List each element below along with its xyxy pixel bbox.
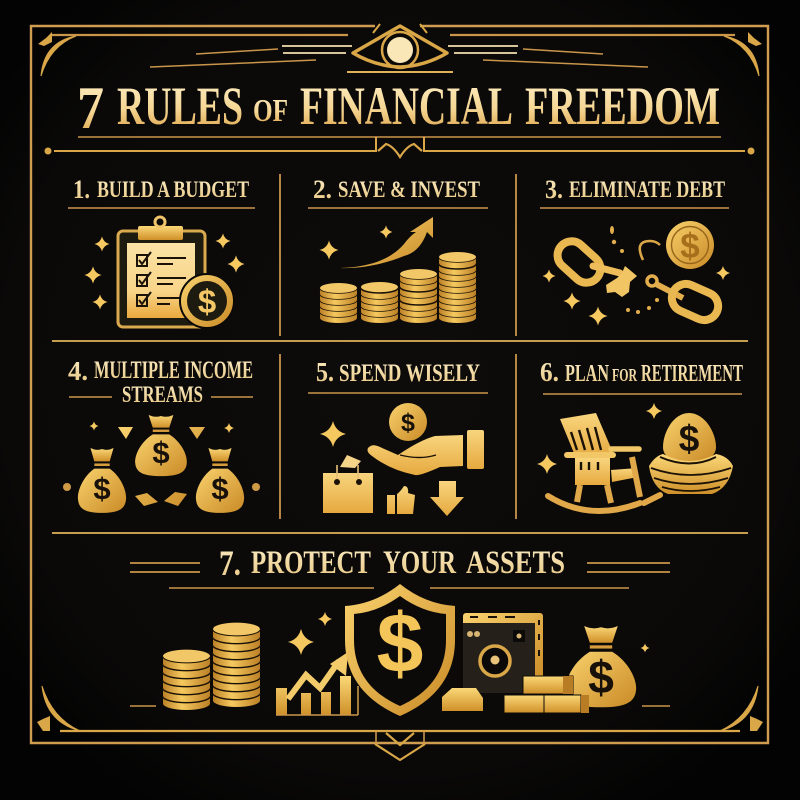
heading	[540, 175, 729, 208]
icon: three money bags: $	[152, 435, 170, 470]
icon: safe	[463, 613, 543, 693]
title: FREEDOM	[525, 76, 720, 136]
heading	[68, 175, 255, 208]
heading: MULTIPLE INCOME	[94, 357, 253, 384]
icon: shield with dollar	[345, 584, 455, 716]
icon: rocking chair and nest egg	[537, 403, 733, 511]
heading: YOUR	[383, 545, 457, 581]
panel: 2 save and invest	[308, 175, 488, 323]
heading: SPEND WISELY	[339, 360, 480, 387]
heading: 7.	[219, 543, 241, 583]
heading: ASSETS	[466, 545, 565, 581]
heading	[68, 356, 253, 407]
heading: SAVE & INVEST	[338, 177, 480, 202]
icon: three money bags: $	[93, 471, 111, 506]
heading: 1.	[73, 175, 90, 204]
title	[77, 75, 720, 141]
icon: gold bars and money bag	[442, 626, 650, 713]
heading: STREAMS	[122, 382, 203, 407]
panel: 4 multiple income streams	[63, 356, 260, 513]
icon: clipboard with coin	[84, 217, 244, 328]
heading	[308, 357, 488, 393]
icon: all-seeing eye	[347, 26, 453, 72]
icon: coin stacks	[163, 623, 260, 710]
heading	[130, 543, 670, 706]
heading	[540, 357, 743, 394]
panel: 3 eliminate debt	[540, 175, 730, 326]
heading: ELIMINATE DEBT	[569, 177, 725, 202]
icon: three money bags: $	[211, 471, 229, 506]
heading: 6.	[540, 357, 559, 387]
title: 7	[77, 75, 104, 141]
icon: broken chain and coin: $	[680, 227, 700, 266]
heading: PLAN	[565, 361, 609, 387]
icon: coin stacks with arrow	[320, 217, 476, 323]
icon: broken chain and coin	[542, 221, 730, 326]
heading: 5.	[316, 357, 334, 387]
icon: growth chart	[276, 612, 358, 715]
icon: clipboard with coin: $	[198, 283, 216, 320]
heading: 3.	[545, 175, 563, 204]
heading: FOR	[612, 365, 638, 385]
icon: shield with dollar: $	[377, 596, 423, 690]
heading: BUILD A BUDGET	[97, 177, 249, 202]
icon: three money bags	[63, 415, 260, 513]
heading: 2.	[313, 175, 332, 204]
heading	[308, 175, 488, 208]
icon: gold bars and money bag: $	[588, 651, 614, 703]
panel: 1 build a budget	[68, 175, 255, 328]
panel: 6 plan for retirement	[537, 357, 743, 511]
title: FINANCIAL	[300, 76, 513, 136]
panel: 5 spend wisely	[308, 357, 488, 516]
panel: 7 protect your assets	[130, 543, 670, 716]
title: OF	[253, 92, 288, 128]
heading: 4.	[68, 356, 88, 386]
heading: PROTECT	[251, 545, 371, 581]
icon: hand, coin, bag and arrow	[320, 403, 484, 516]
icon: hand, coin, bag and arrow: $	[401, 409, 415, 437]
icon: rocking chair and nest egg: $	[679, 418, 700, 459]
title: RULES	[117, 76, 243, 136]
